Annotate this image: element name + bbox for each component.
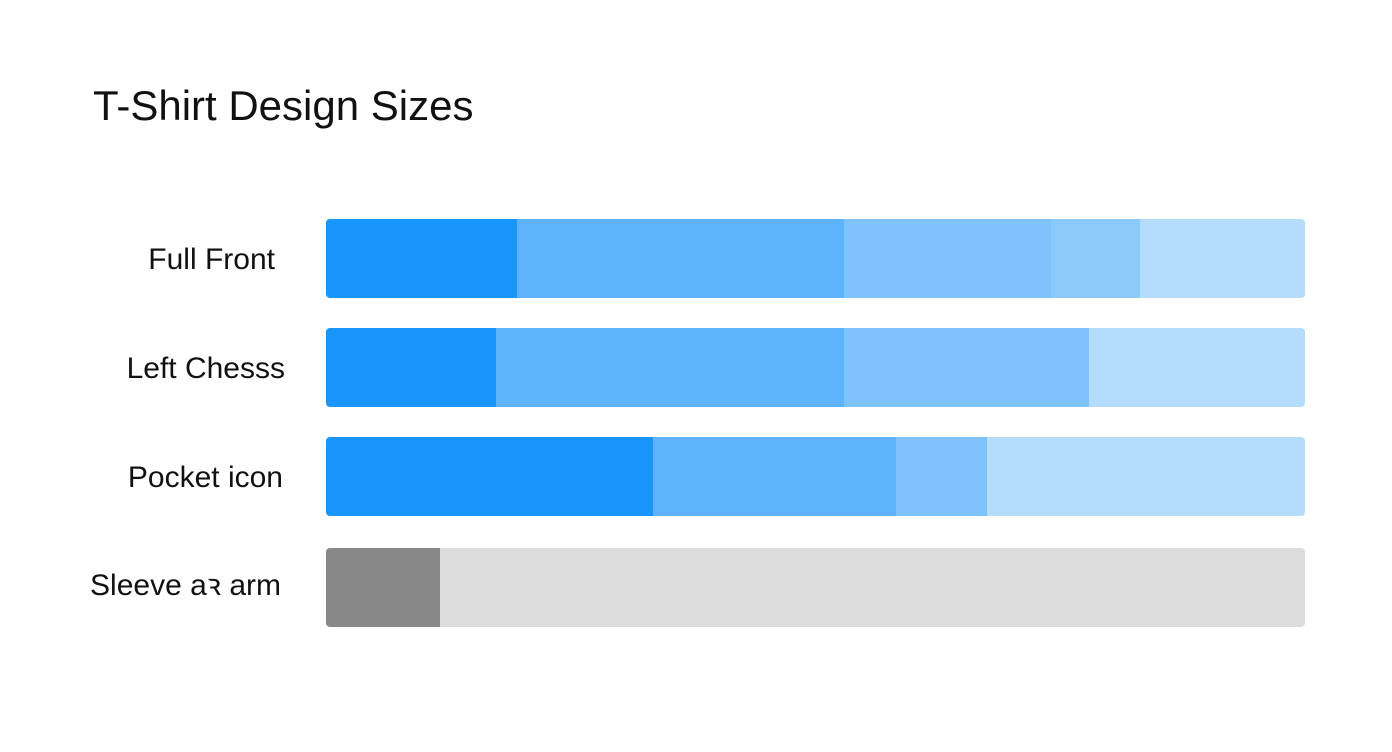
label: pocket icon: Pocket icon	[128, 461, 283, 494]
bar: sleeve arm	[326, 548, 1305, 627]
label: left chest: Left Chesss	[127, 352, 285, 385]
label: full front: Full Front	[148, 243, 275, 276]
bar: full front	[326, 219, 1305, 298]
title: T-Shirt Design Sizes	[93, 82, 473, 129]
bar: left chest	[326, 328, 1305, 407]
label: sleeve arm: Sleeve aꝛ arm	[90, 569, 281, 602]
bar: pocket icon	[326, 437, 1305, 516]
